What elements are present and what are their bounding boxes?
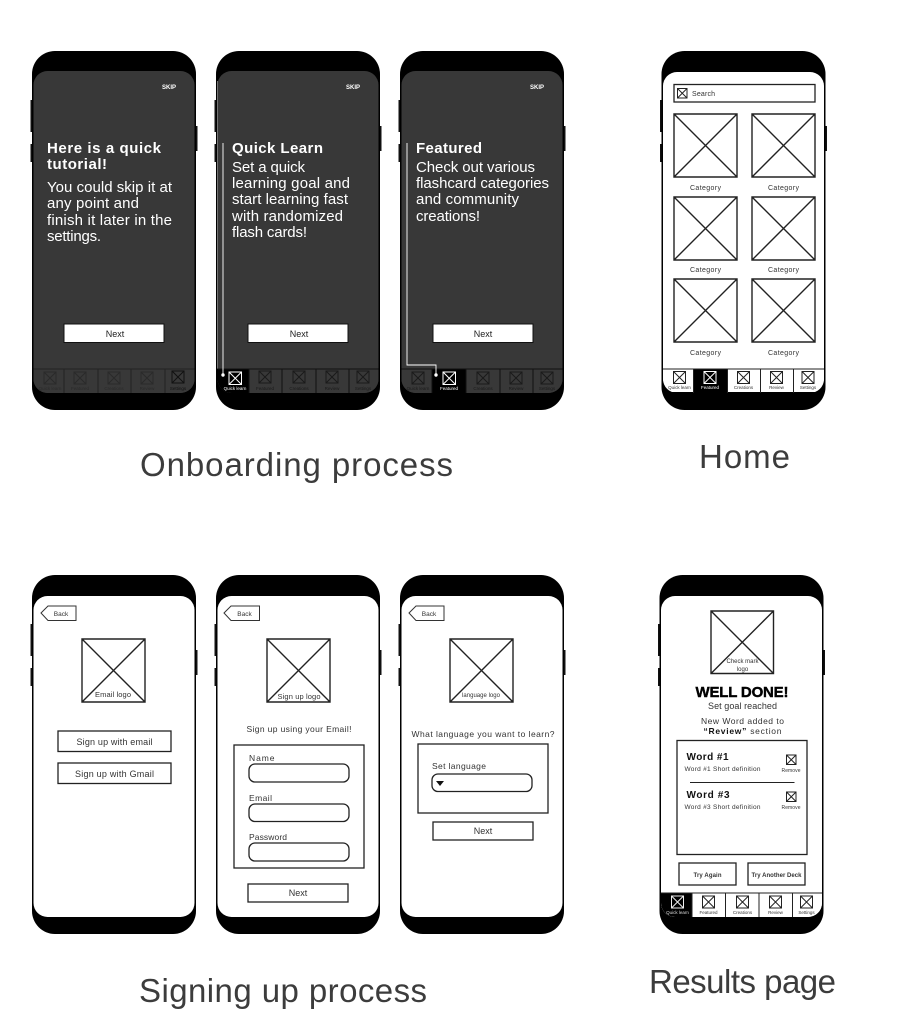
- language question: What language you want to learn?: [412, 729, 555, 739]
- tab bar with featured highlighted: Settings: [539, 386, 556, 391]
- tab bar with featured highlighted: Creations: [473, 386, 493, 391]
- featured text: [416, 140, 549, 225]
- quick learn text: learning goal and: [232, 175, 350, 192]
- phone: sign up language: [398, 575, 566, 934]
- language form: [418, 744, 548, 813]
- caption: home: Home: [699, 438, 790, 475]
- back button: [41, 606, 76, 620]
- try another deck button: Try Another Deck: [752, 873, 802, 879]
- new words list: Word #3 Short definition: [684, 804, 761, 811]
- phone: onboarding featured: [398, 51, 566, 410]
- result heading: “Review” section: [704, 726, 782, 736]
- signup form: Name: [249, 753, 275, 763]
- tab bar with quick learn highlighted: [660, 893, 824, 917]
- tutorial text: [47, 140, 173, 245]
- dimmed tab bar: Featured: [71, 386, 90, 391]
- language form: Set language: [432, 761, 486, 771]
- check mark logo placeholder: logo: [737, 667, 749, 673]
- next button: Next: [289, 888, 308, 898]
- tab bar with quick learn highlighted: Featured: [256, 386, 275, 391]
- quick learn text: with randomized: [231, 208, 343, 225]
- dimmed tab bar: Settings: [170, 386, 187, 391]
- tutorial text: Here is a quick: [47, 140, 162, 157]
- tab bar with quick learn highlighted: Creations: [733, 910, 753, 915]
- new words list: Remove: [782, 805, 801, 811]
- next button: Next: [474, 329, 493, 339]
- next button: [248, 324, 348, 342]
- caption: onboarding: Onboarding process: [140, 446, 453, 483]
- back button: Back: [54, 611, 69, 618]
- tab bar with featured highlighted: Review: [509, 386, 524, 391]
- quick learn text: [231, 140, 350, 241]
- tab bar with quick learn highlighted: Settings: [798, 910, 815, 915]
- new words list: [677, 740, 807, 854]
- tab bar with quick learn highlighted: Settings: [355, 386, 372, 391]
- search bar: [674, 84, 815, 102]
- next button: [248, 884, 348, 902]
- next button: [433, 822, 533, 840]
- caption: results: Results page: [649, 963, 836, 1000]
- signup form: [234, 745, 364, 868]
- signup form: Password: [249, 832, 287, 842]
- try again button: [679, 863, 736, 885]
- tutorial text: finish it later in the: [47, 212, 172, 229]
- tab bar with featured highlighted: [400, 369, 564, 393]
- back button: [409, 606, 444, 620]
- check mark logo placeholder: Check mark: [726, 659, 760, 665]
- tab bar with featured highlighted: Review: [769, 385, 785, 390]
- quick learn text: Set a quick: [232, 159, 306, 176]
- featured text: Check out various: [416, 159, 535, 176]
- sign up with email button: [58, 731, 171, 752]
- language logo placeholder: language logo: [462, 693, 501, 699]
- phone: results page: [658, 575, 825, 934]
- sign up logo placeholder: [267, 639, 330, 702]
- featured text: creations!: [416, 208, 480, 225]
- category grid: Category: [768, 267, 800, 274]
- skip link: SKIP: [530, 85, 544, 91]
- form heading: Sign up using your Email!: [246, 724, 352, 734]
- featured text: flashcard categories: [416, 175, 549, 192]
- search bar: Search: [692, 91, 715, 98]
- sign up logo placeholder: Sign up logo: [278, 692, 320, 701]
- quick learn text: flash cards!: [232, 224, 307, 241]
- tab bar with quick learn highlighted: Creations: [289, 386, 309, 391]
- tutorial text: You could skip it at: [47, 179, 173, 196]
- tab bar with featured highlighted: Creations: [734, 385, 754, 390]
- next button: Next: [290, 329, 309, 339]
- tab bar with quick learn highlighted: Quick learn: [666, 910, 689, 915]
- tab bar with featured highlighted: Quick learn: [668, 385, 691, 390]
- try again button: Try Again: [694, 873, 722, 879]
- category grid: Category: [690, 185, 722, 192]
- next button: [64, 324, 164, 342]
- dimmed tab bar: Quick learn: [39, 386, 62, 391]
- email logo placeholder: [82, 639, 145, 702]
- sign up with gmail button: Sign up with Gmail: [75, 769, 154, 779]
- language logo placeholder: [450, 639, 513, 702]
- signup form: Email: [249, 793, 272, 803]
- skip link: SKIP: [162, 85, 176, 91]
- email logo placeholder: Email logo: [95, 690, 131, 699]
- tab bar with featured highlighted: Featured: [701, 385, 720, 390]
- new words list: Remove: [782, 768, 801, 774]
- phone: home: [660, 51, 827, 410]
- new words list: Word #1: [686, 752, 729, 763]
- tab bar with quick learn highlighted: [216, 369, 380, 393]
- tab bar with featured highlighted: [662, 368, 826, 393]
- category grid: Category: [690, 350, 722, 357]
- phone: onboarding quick learn: [214, 51, 382, 410]
- back button: Back: [422, 611, 437, 618]
- phone: sign up options: [30, 575, 198, 934]
- sign up with email button: Sign up with email: [76, 737, 152, 747]
- tutorial text: any point and: [47, 195, 139, 212]
- check mark logo placeholder: [711, 611, 774, 674]
- tab bar with quick learn highlighted: Review: [325, 386, 340, 391]
- phone: onboarding tutorial intro: [30, 51, 198, 410]
- callout line to quick learn tab: [221, 143, 225, 377]
- next button: Next: [474, 826, 493, 836]
- tutorial text: tutorial!: [47, 156, 107, 173]
- result heading: WELL DONE!: [696, 684, 788, 701]
- tab bar with featured highlighted: Quick learn: [407, 386, 430, 391]
- tab bar with featured highlighted: Settings: [800, 385, 817, 390]
- back button: Back: [237, 611, 252, 618]
- featured text: and community: [416, 191, 520, 208]
- category grid: [674, 114, 815, 357]
- dimmed tab bar: Creations: [104, 386, 124, 391]
- quick learn text: Quick Learn: [232, 140, 323, 157]
- category grid: Category: [768, 185, 800, 192]
- new words list: Word #3: [686, 790, 730, 801]
- tab bar with quick learn highlighted: Featured: [699, 910, 718, 915]
- featured text: Featured: [416, 140, 482, 157]
- category grid: Category: [690, 267, 722, 274]
- caption: signing up: Signing up process: [139, 972, 427, 1009]
- callout line to featured tab: [407, 143, 438, 377]
- category grid: Category: [768, 350, 800, 357]
- next button: [433, 324, 533, 342]
- result heading: New Word added to: [701, 716, 784, 726]
- quick learn text: start learning fast: [232, 191, 349, 208]
- phone: sign up email form: [214, 575, 382, 934]
- tutorial text: settings.: [47, 228, 101, 245]
- try another deck button: [748, 863, 805, 885]
- dimmed tab bar: Review: [140, 386, 155, 391]
- result heading: [696, 684, 788, 736]
- sign up with gmail button: [58, 763, 171, 784]
- next button: Next: [106, 329, 125, 339]
- tab bar with quick learn highlighted: Review: [768, 910, 784, 915]
- result heading: Set goal reached: [708, 701, 777, 711]
- tab bar with quick learn highlighted: Quick learn: [224, 386, 247, 391]
- tab bar with featured highlighted: Featured: [440, 386, 459, 391]
- skip link: SKIP: [346, 85, 360, 91]
- back button: [224, 606, 260, 620]
- new words list: Word #1 Short definition: [684, 766, 761, 773]
- dimmed tab bar: [32, 369, 196, 393]
